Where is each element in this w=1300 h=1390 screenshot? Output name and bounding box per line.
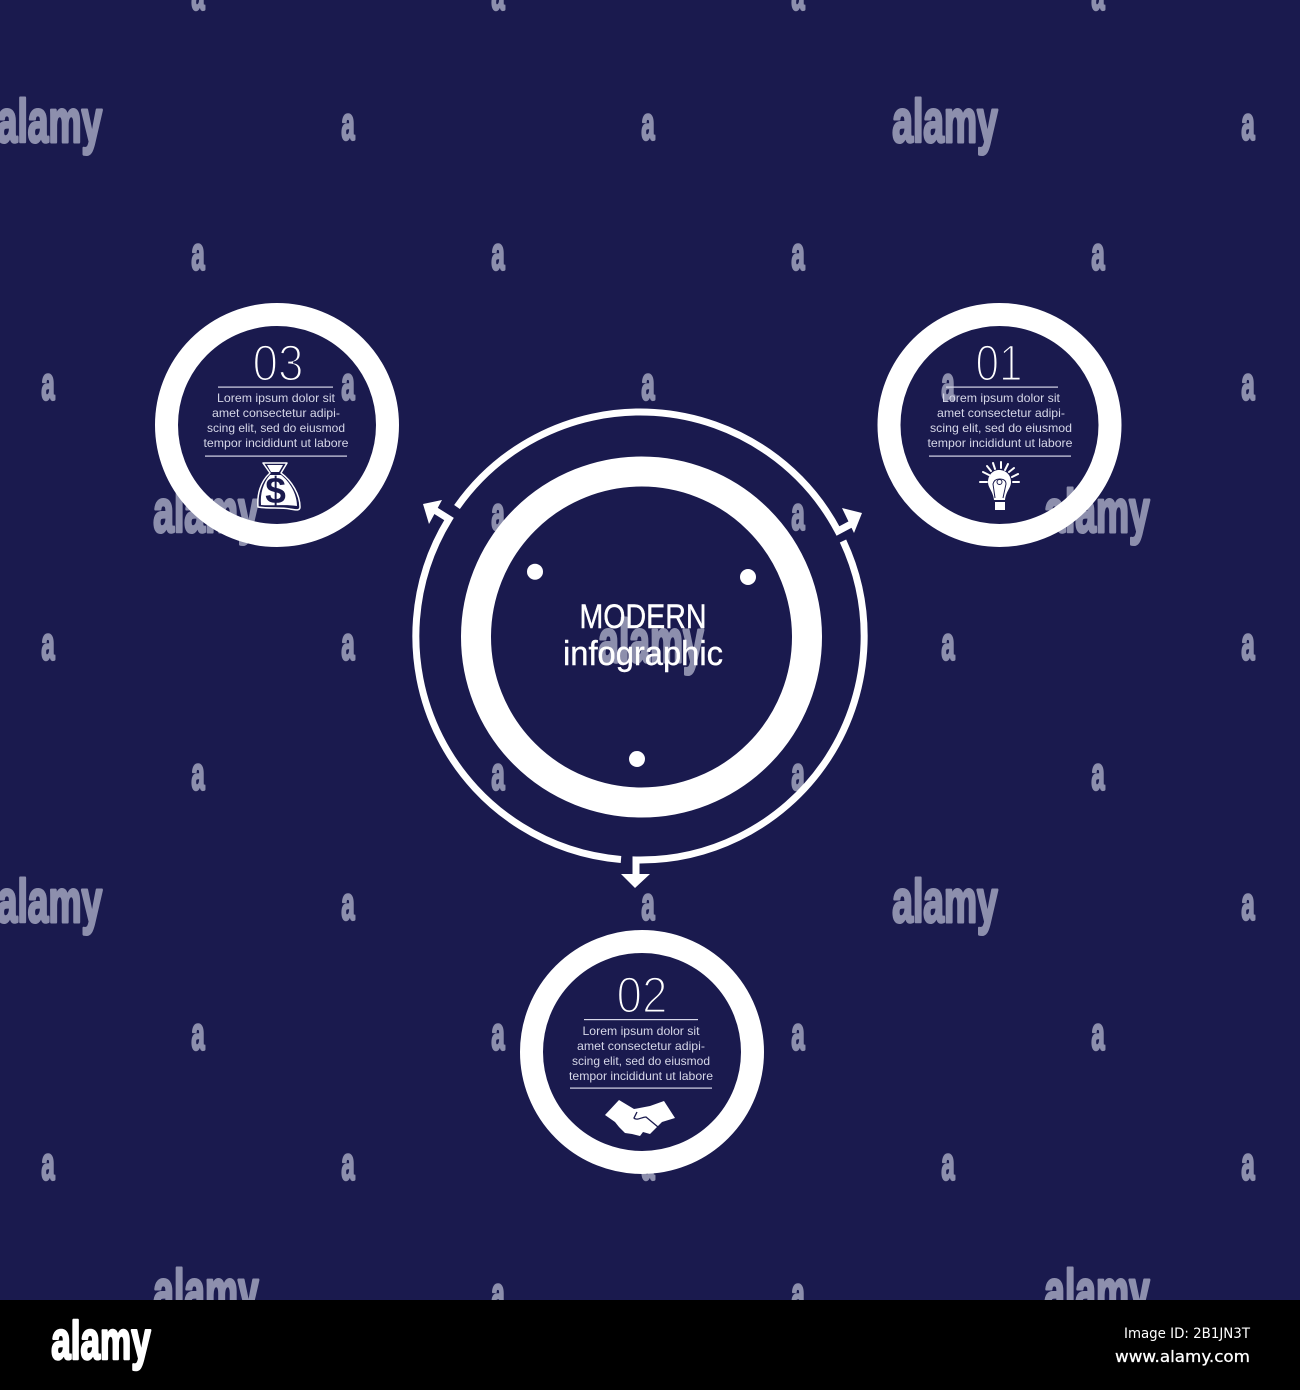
watermark pattern: a xyxy=(1241,358,1255,410)
watermark pattern: a xyxy=(1241,878,1255,930)
watermark pattern: a xyxy=(791,1008,805,1060)
arrow: toward 03 xyxy=(416,500,621,860)
watermark pattern: alamy xyxy=(892,88,998,155)
watermark pattern: a xyxy=(191,748,205,800)
watermark pattern: alamy xyxy=(892,868,998,935)
watermark pattern: a xyxy=(1241,618,1255,670)
description 02: scing elit, sed do eiusmod xyxy=(572,1054,710,1068)
description 01: Lorem ipsum dolor sit xyxy=(942,391,1061,405)
watermark pattern: a xyxy=(191,228,205,280)
description 01: scing elit, sed do eiusmod xyxy=(930,421,1072,435)
icon: money bag: $ xyxy=(265,470,286,511)
number 01: 01 xyxy=(976,334,1022,392)
central title: infographic xyxy=(563,635,723,673)
description 03: amet consectetur adipi- xyxy=(212,406,340,420)
central title xyxy=(563,598,723,673)
watermark pattern: a xyxy=(1241,1138,1255,1190)
watermark pattern: a xyxy=(41,618,55,670)
watermark pattern: a xyxy=(341,618,355,670)
watermark pattern: a xyxy=(341,98,355,150)
watermark pattern: a xyxy=(791,1268,805,1320)
watermark pattern: a xyxy=(941,1138,955,1190)
watermark pattern: alamy xyxy=(1044,478,1150,545)
panel: 03 xyxy=(166,314,388,536)
watermark pattern: a xyxy=(1091,748,1105,800)
node dots xyxy=(527,564,756,767)
icon: money bag xyxy=(258,463,300,511)
watermark pattern: a xyxy=(641,1138,655,1190)
icon: light bulb xyxy=(980,462,1019,510)
description 01 xyxy=(928,386,1073,457)
watermark pattern: alamy xyxy=(153,478,259,545)
description 01: tempor incididunt ut labore xyxy=(928,436,1073,450)
number 03: 03 xyxy=(252,334,304,392)
panel: 01 xyxy=(889,314,1110,536)
description 01: amet consectetur adipi- xyxy=(937,406,1065,420)
number 02: 02 xyxy=(616,966,668,1024)
watermark pattern: alamy xyxy=(598,608,704,675)
arrow: toward 01 xyxy=(457,412,862,533)
watermark pattern: a xyxy=(941,618,955,670)
watermark pattern: a xyxy=(1091,228,1105,280)
description 03 xyxy=(204,386,349,457)
watermark pattern: a xyxy=(791,228,805,280)
watermark pattern: a xyxy=(791,488,805,540)
watermark pattern: a xyxy=(491,488,505,540)
description 03: scing elit, sed do eiusmod xyxy=(207,421,345,435)
watermark pattern: alamy xyxy=(153,1258,259,1325)
watermark pattern: a xyxy=(641,878,655,930)
description 02: Lorem ipsum dolor sit xyxy=(582,1024,700,1038)
website: www.alamy.com xyxy=(1115,1347,1250,1366)
watermark pattern: a xyxy=(491,748,505,800)
watermark pattern: alamy xyxy=(1044,1258,1150,1325)
watermark pattern: a xyxy=(491,1008,505,1060)
icon: handshake xyxy=(605,1100,675,1136)
description 02 xyxy=(569,1019,713,1089)
watermark pattern: a xyxy=(641,98,655,150)
watermark pattern: a xyxy=(641,358,655,410)
description 02: tempor incididunt ut labore xyxy=(569,1069,713,1083)
watermark pattern: a xyxy=(41,1138,55,1190)
watermark pattern: a xyxy=(791,748,805,800)
image id: Image ID: 2B1JN3T xyxy=(1124,1326,1250,1342)
watermark pattern: a xyxy=(491,228,505,280)
watermark pattern: a xyxy=(41,358,55,410)
panel: 02 xyxy=(532,942,752,1162)
central hub xyxy=(476,472,807,802)
watermark pattern: a xyxy=(491,1268,505,1320)
arrow: toward 02 xyxy=(621,541,864,888)
watermark pattern: a xyxy=(341,878,355,930)
central ring xyxy=(476,472,807,802)
description 03: Lorem ipsum dolor sit xyxy=(217,391,336,405)
watermark pattern: a xyxy=(341,358,355,410)
watermark pattern: a xyxy=(191,1008,205,1060)
watermark pattern: a xyxy=(941,358,955,410)
footer bar xyxy=(0,1300,1300,1390)
footer logo: alamy xyxy=(51,1310,151,1371)
watermark pattern: a xyxy=(1091,1008,1105,1060)
description 02: amet consectetur adipi- xyxy=(577,1039,705,1053)
central title: MODERN xyxy=(580,598,706,636)
watermark pattern: a xyxy=(341,1138,355,1190)
watermark pattern: a xyxy=(1241,98,1255,150)
description 03: tempor incididunt ut labore xyxy=(204,436,349,450)
